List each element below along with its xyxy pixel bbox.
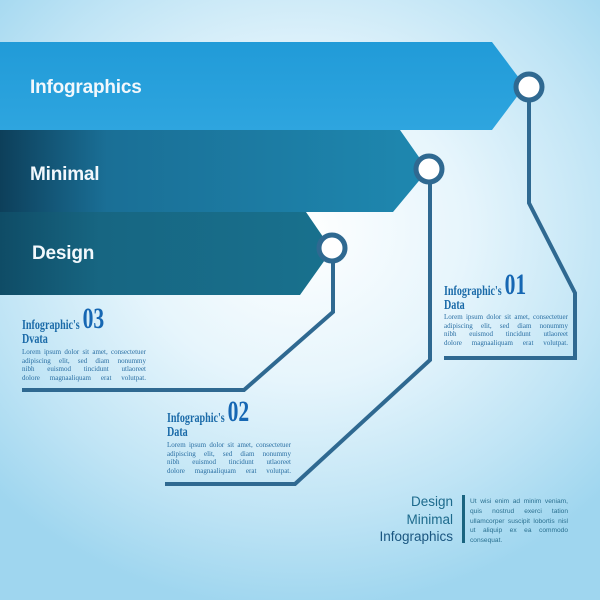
block 03 bbox=[22, 302, 146, 382]
text 03: Lorem ipsum dolor sit amet, consectetuer bbox=[22, 348, 146, 356]
ribbon 3 bbox=[0, 212, 332, 295]
text 01: nibh euismod tincidunt utlaoreet bbox=[444, 330, 568, 338]
block 03: Dvata bbox=[22, 332, 48, 347]
ribbon 2 bbox=[0, 130, 428, 212]
heading 02: Infographic's bbox=[167, 411, 225, 426]
caption paragraph: Ut wisi enim ad minim veniam, bbox=[470, 498, 568, 505]
connector 1 bbox=[444, 74, 575, 358]
heading 03 bbox=[22, 302, 104, 335]
text 03: nibh euismod tincidunt utlaoreet bbox=[22, 365, 146, 373]
text 02: Lorem ipsum dolor sit amet, consectetuer bbox=[167, 441, 291, 449]
text 02: nibh euismod tincidunt utlaoreet bbox=[167, 458, 291, 466]
text 01: dolore magnaaliquam erat volutpat. bbox=[444, 339, 568, 347]
ribbon label: Minimal: Minimal bbox=[30, 164, 99, 185]
block 01 bbox=[444, 268, 568, 347]
bottom right caption bbox=[379, 494, 568, 544]
caption paragraph bbox=[470, 498, 568, 544]
text 02: adipiscing elit, sed diam nonummy bbox=[167, 450, 291, 458]
caption paragraph: quis nostrud exerci tation bbox=[470, 508, 568, 515]
text 02 bbox=[167, 441, 291, 475]
heading 01: 01 bbox=[505, 268, 526, 301]
block 02: Data bbox=[167, 425, 188, 440]
ribbon label: Design: Design bbox=[32, 243, 94, 264]
text 03: dolore magnaaliquam erat volutpat. bbox=[22, 374, 146, 382]
block 01: Data bbox=[444, 298, 465, 313]
caption paragraph: consequat. bbox=[470, 537, 502, 544]
heading 01 bbox=[444, 268, 526, 301]
ribbon 1 bbox=[0, 42, 525, 130]
text 01: adipiscing elit, sed diam nonummy bbox=[444, 322, 568, 330]
caption words bbox=[379, 494, 453, 544]
heading 02: 02 bbox=[228, 395, 249, 428]
caption words: Design bbox=[411, 494, 453, 509]
text 02: dolore magnaaliquam erat volutpat. bbox=[167, 467, 291, 475]
heading 03: Infographic's bbox=[22, 318, 80, 333]
block 02 bbox=[167, 395, 291, 475]
heading 01: Infographic's bbox=[444, 284, 502, 299]
connector 3 bbox=[22, 235, 345, 390]
text 01 bbox=[444, 313, 568, 347]
caption words: Infographics bbox=[379, 529, 453, 544]
text 03: adipiscing elit, sed diam nonummy bbox=[22, 357, 146, 365]
text 01: Lorem ipsum dolor sit amet, consectetuer bbox=[444, 313, 568, 321]
caption paragraph: ut aliquip ex ea commodo bbox=[470, 527, 568, 534]
heading 02 bbox=[167, 395, 249, 428]
caption words: Minimal bbox=[406, 512, 453, 526]
caption paragraph: ullamcorper suscipit lobortis nisl bbox=[470, 518, 568, 525]
caption divider bbox=[462, 495, 465, 543]
heading 03: 03 bbox=[83, 302, 104, 335]
connector 2 bbox=[165, 156, 442, 484]
text 03 bbox=[22, 348, 146, 382]
ribbon label: Infographics: Infographics bbox=[30, 77, 142, 98]
